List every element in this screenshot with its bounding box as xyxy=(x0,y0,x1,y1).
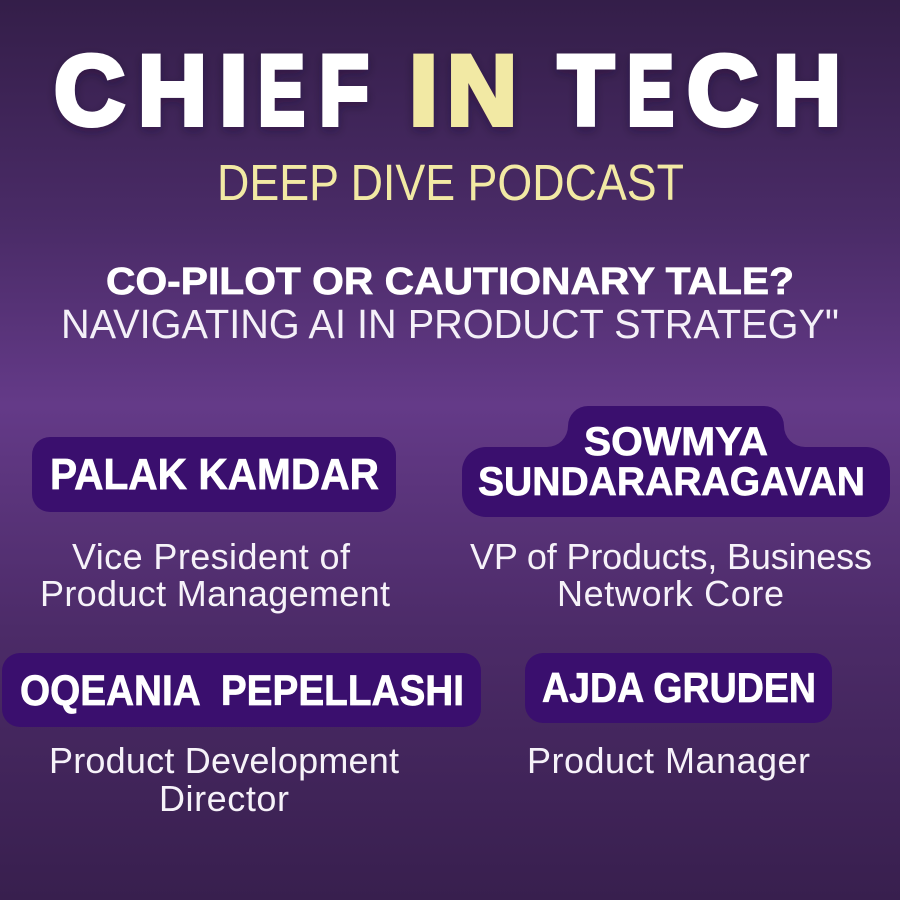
name badge: Palak Kamdar: PALAK KAMDAR xyxy=(50,450,379,499)
title: H xyxy=(773,34,841,146)
role: Sowmya Sundararagavan: VP of Products, Business xyxy=(470,536,872,577)
title: C xyxy=(687,34,758,146)
role: Ajda Gruden: Product Manager xyxy=(527,740,810,781)
speaker: Oqeania Pepellashi xyxy=(2,653,481,819)
title: C xyxy=(54,34,125,146)
title: E xyxy=(258,34,305,146)
title: I xyxy=(219,34,248,146)
name badge: Oqeania Pepellashi: OQEANIA PEPELLASHI xyxy=(20,667,464,715)
title: I xyxy=(409,34,438,146)
role: Oqeania Pepellashi xyxy=(49,740,399,819)
title: E xyxy=(627,34,674,146)
role: Palak Kamdar xyxy=(40,536,390,614)
title: N xyxy=(447,34,517,146)
title xyxy=(54,34,841,146)
episode heading: CO-PILOT OR CAUTIONARY TALE? xyxy=(106,261,794,303)
name badge: Sowmya Sundararagavan xyxy=(462,406,890,517)
speaker: Sowmya Sundararagavan xyxy=(462,406,890,614)
subtitle: DEEP DIVE PODCAST xyxy=(217,154,684,211)
role: Oqeania Pepellashi: Product Development xyxy=(49,740,399,781)
episode subheading: NAVIGATING AI IN PRODUCT STRATEGY" xyxy=(61,301,839,347)
name badge: Palak Kamdar xyxy=(32,437,396,512)
speaker: Ajda Gruden xyxy=(525,653,832,781)
role: Sowmya Sundararagavan xyxy=(470,536,872,614)
title: T xyxy=(558,34,614,146)
name badge: Ajda Gruden xyxy=(525,653,832,723)
name badge: Oqeania Pepellashi xyxy=(2,653,481,727)
role: Oqeania Pepellashi: Director xyxy=(159,778,289,819)
name badge: Sowmya Sundararagavan: SUNDARARAGAVAN xyxy=(478,460,865,504)
role: Palak Kamdar: Vice President of xyxy=(72,536,351,577)
name badge: Sowmya Sundararagavan: SOWMYA xyxy=(584,420,768,464)
role: Sowmya Sundararagavan: Network Core xyxy=(557,573,784,614)
name badge: Ajda Gruden: AJDA GRUDEN xyxy=(542,664,816,711)
title: H xyxy=(138,34,207,146)
role: Palak Kamdar: Product Management xyxy=(40,573,390,614)
speaker: Palak Kamdar xyxy=(32,437,396,614)
title: F xyxy=(319,34,369,146)
